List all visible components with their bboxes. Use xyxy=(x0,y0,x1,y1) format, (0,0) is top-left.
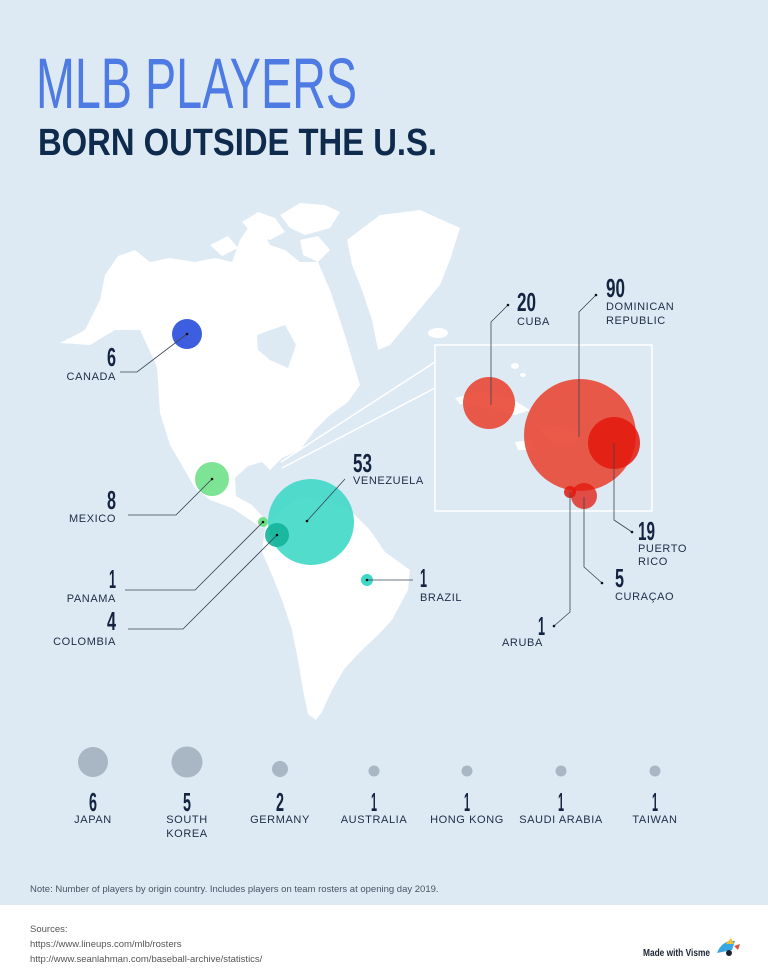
japan xyxy=(74,747,112,826)
bubble: puerto rico xyxy=(588,417,687,568)
bubble: dominican republic: REPUBLIC xyxy=(606,315,666,327)
bubble: venezuela: 53 xyxy=(353,448,372,478)
saudi arabia: 1 xyxy=(558,787,564,817)
bubble: colombia: 4 xyxy=(107,606,116,636)
germany: 2 xyxy=(276,787,284,817)
south korea: SOUTH xyxy=(166,814,208,826)
japan: 6 xyxy=(89,787,97,817)
hudson bay xyxy=(257,325,296,368)
bubble: aruba: ARUBA xyxy=(502,637,543,649)
map xyxy=(60,203,580,720)
title: MLB PLAYERS xyxy=(36,45,357,124)
sources: Sources: xyxy=(30,924,68,935)
bubble: brazil xyxy=(361,563,462,604)
germany: GERMANY xyxy=(250,814,310,826)
bubble: cuba xyxy=(463,287,550,429)
saudi arabia: SAUDI ARABIA xyxy=(519,814,603,826)
bubble: canada: 6 xyxy=(107,342,116,372)
australia: AUSTRALIA xyxy=(341,814,407,826)
bubble: curacao: CURAÇAO xyxy=(615,591,674,603)
bubble: canada: CANADA xyxy=(67,371,116,383)
bubble: venezuela xyxy=(268,448,424,565)
bubble: dominican republic xyxy=(524,273,674,491)
bubble: panama xyxy=(67,517,268,605)
bubble: mexico xyxy=(69,462,229,525)
bubble: dominican republic: 90 xyxy=(606,273,625,303)
hong kong: 1 xyxy=(464,787,470,817)
other countries row xyxy=(74,746,678,840)
bubble: brazil: BRAZIL xyxy=(420,592,462,604)
hong kong xyxy=(430,766,504,826)
bubble: puerto rico: 19 xyxy=(638,516,655,546)
visme logo xyxy=(643,938,740,959)
bubble: colombia xyxy=(53,523,289,648)
bubble: mexico: MEXICO xyxy=(69,513,116,525)
bubble: canada xyxy=(67,319,202,383)
germany xyxy=(250,761,310,826)
japan: JAPAN xyxy=(74,814,112,826)
bubble: curacao: 5 xyxy=(615,563,624,593)
taiwan: TAIWAN xyxy=(632,814,678,826)
taiwan xyxy=(632,766,678,826)
bubble: mexico: 8 xyxy=(107,485,116,515)
taiwan: 1 xyxy=(652,787,658,817)
bubble: aruba: 1 xyxy=(538,611,545,641)
bubble: venezuela: VENEZUELA xyxy=(353,475,424,487)
bubble: colombia: COLOMBIA xyxy=(53,636,116,648)
bubble: cuba: CUBA xyxy=(517,316,550,328)
bubble: puerto rico: RICO xyxy=(638,556,668,568)
south korea: KOREA xyxy=(166,828,208,840)
greenland xyxy=(347,210,460,350)
hong kong: HONG KONG xyxy=(430,814,504,826)
iceland xyxy=(428,328,448,338)
saudi arabia xyxy=(519,766,603,826)
note: Note: Number of players by origin country. Includes players on team rosters at opening day 2019. xyxy=(30,884,439,895)
sources xyxy=(30,924,263,965)
north america xyxy=(60,225,360,528)
arctic islands xyxy=(242,212,285,240)
australia xyxy=(341,766,407,826)
sources: https://www.lineups.com/mlb/rosters xyxy=(30,939,182,950)
inset box with connector lines xyxy=(281,345,652,511)
sources: http://www.seanlahman.com/baseball-archive/statistics/ xyxy=(30,954,263,965)
footer background xyxy=(0,905,768,980)
bubble: dominican republic: DOMINICAN xyxy=(606,301,674,313)
visme logo: Made with Visme xyxy=(643,948,710,959)
bubble: puerto rico: PUERTO xyxy=(638,543,687,555)
bubble: cuba: 20 xyxy=(517,287,536,317)
bubble: curacao xyxy=(571,483,674,603)
south korea: 5 xyxy=(183,787,191,817)
south america xyxy=(262,497,410,720)
bubble: aruba xyxy=(502,486,576,649)
australia: 1 xyxy=(371,787,377,817)
subtitle: BORN OUTSIDE THE U.S. xyxy=(38,122,437,164)
bubble: brazil: 1 xyxy=(420,563,427,593)
south korea xyxy=(166,746,208,840)
bubble: panama: PANAMA xyxy=(67,593,116,605)
bubble: panama: 1 xyxy=(109,564,116,594)
caribbean islands in inset xyxy=(455,392,530,415)
